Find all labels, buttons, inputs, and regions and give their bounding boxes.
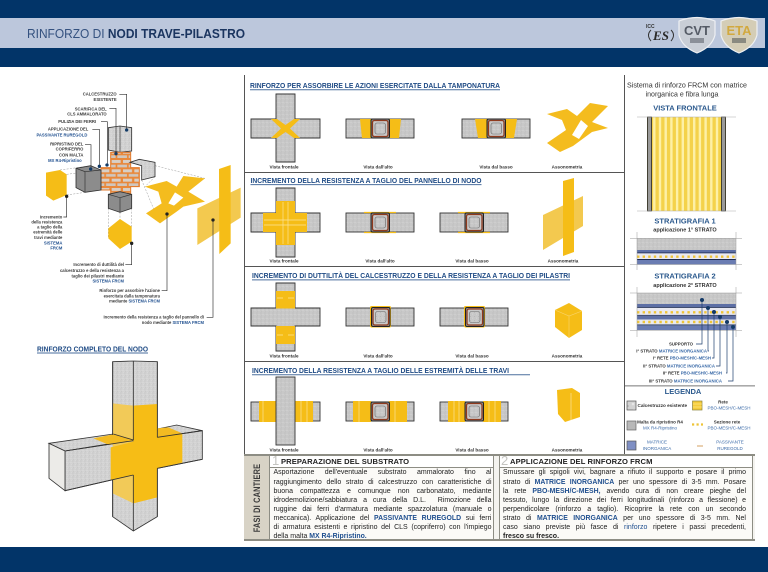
item: sezione rete: PBO-MESH/C-MESH (707, 426, 751, 430)
leader: ripristino copriferro: RIPRISTINO DEL (50, 141, 84, 146)
step 1 text: meccanica). Applicazione del PASSIVANTE RUREGOLD sui ferri (274, 515, 492, 522)
row 3: pilastri (251, 271, 583, 358)
panel: FRCM system (625, 82, 755, 386)
leader: estremità travi: a taglio della (37, 224, 63, 229)
step 2 text: strato di MATRICE INORGANICA per uno spessore di 3-5 mm. Posare (503, 479, 746, 486)
step 2 text: caso siano previste più fasce di rinforzo ripetere i passi precedenti, (503, 524, 746, 531)
bottom view: Vista dal basso (455, 354, 489, 358)
leader: calcestruzzo esistente: ESISTENTE (94, 97, 117, 102)
step 2 (499, 456, 753, 539)
beam end section (49, 443, 65, 491)
leader: ripristino copriferro: COPRIFERRO (56, 146, 84, 151)
step 1 text: idrodemolizione/sabbiatura a cura della D.L. Rimozione della (274, 497, 492, 504)
leader: estremità travi: della resistenza (31, 219, 63, 224)
front view: Vista frontale (269, 164, 299, 170)
legend title: LEGENDA (665, 387, 702, 396)
yellow jacket: left beam (46, 170, 67, 201)
front view: Vista frontale (269, 258, 299, 264)
item: malta: Malta da ripristino R4 (637, 420, 683, 424)
bottom view: Vista dal basso (455, 258, 489, 264)
panel dividers (244, 75, 624, 454)
step 2 text: la rete PBO-MESH/C-MESH, avendo cura di non creare pieghe del (503, 488, 746, 495)
stratigrafia 1: STRATIGRAFIA 1 (654, 216, 716, 226)
leader: tamponatura (99, 212, 169, 303)
column (113, 361, 157, 531)
row 1: tamponatura (250, 81, 608, 170)
item: passivante (697, 440, 744, 451)
layer labels (636, 342, 722, 384)
bottom view (440, 401, 508, 452)
axonometric: Assonometria (552, 448, 583, 452)
block: left beam (76, 166, 101, 192)
logo: ETA shield (721, 18, 757, 53)
leader: duttilità pilastri: SISTEMA FRCM (93, 278, 125, 283)
step 1 text: di armatura esistenti e ripristino del CLS (copriferro) con l'impiego (274, 524, 492, 531)
dashed guide lines (60, 166, 205, 238)
leader: estremità travi: estremità delle (33, 230, 63, 235)
leader: tamponatura: mediante SISTEMA FRCM (109, 298, 161, 303)
leader: pulizia ferri: PULIZIA DEI FERRI (58, 119, 96, 124)
top view (346, 212, 414, 264)
item: matrice (627, 440, 671, 451)
heading: vista frontale: VISTA FRONTALE (653, 104, 717, 112)
yellow X reinforcement (145, 176, 205, 223)
front view (251, 377, 320, 452)
leader: ripristino copriferro: MX R4-Ripristino (48, 158, 82, 163)
logo: ICC ES: ICC (646, 24, 655, 30)
leader: duttilità pilastri: taglio dei pilastri mediante (72, 273, 125, 278)
step 2 text (503, 468, 746, 540)
row 4: travi (251, 366, 583, 452)
front view swatch (637, 117, 736, 211)
axonometric: Assonometria (552, 164, 583, 170)
item: rete: Rete (718, 400, 728, 404)
step 2 text: Smussare gli spigoli vivi, bagnare a rifiuto il supporto e posare il primo (503, 469, 746, 476)
step 1 heading: PREPARAZIONE DEL SUBSTRATO (281, 457, 409, 466)
item: malta: MX R4-Ripristino (643, 426, 677, 430)
beam top face (49, 425, 202, 451)
system title (627, 82, 747, 98)
leader: tamponatura: Rinforzo per assorbire l'azione (99, 288, 161, 293)
item: rete: PBO-MESH/C-MESH (707, 406, 751, 410)
leader: ripristino copriferro (48, 141, 92, 171)
stratigrafia 2 (630, 272, 742, 337)
step 1 text: ruggine dai ferri d'armatura mediante spazzolatura (manuale o (274, 506, 492, 513)
panel: exploded diagram of the node (31, 92, 241, 325)
top view: Vista dall'alto (363, 448, 393, 452)
item: rete (692, 400, 751, 410)
logo: CVT shield (679, 18, 715, 53)
footer band (0, 547, 768, 572)
leader: tamponatura: esercitata dalla tamponatura (104, 293, 161, 298)
leader: pannello di nodo: nodo mediante SISTEMA FRCM (142, 320, 205, 325)
stratigrafia 2: applicazione 2° STRATO (653, 283, 717, 289)
edge lines (65, 361, 202, 531)
logo: ICC ES: ES (652, 28, 669, 43)
bottom view (440, 306, 508, 358)
step 2 text: fresco su fresco. (503, 533, 559, 540)
leader: ripristino copriferro: CON MALTA (59, 152, 83, 157)
logo: CVT shield: CVT (684, 23, 710, 38)
top view (346, 401, 414, 452)
item: matrice: MATRICE (647, 440, 667, 444)
item: sezione rete: Sezione rete (714, 420, 741, 424)
leader: duttilità pilastri (60, 242, 133, 283)
step 1 heading (270, 456, 493, 468)
logo: ICC ES (646, 24, 674, 43)
front view: Vista frontale (269, 448, 299, 452)
leader: estremità travi: Incremento (40, 214, 63, 219)
step 2 heading (500, 456, 752, 468)
bottom view: Vista dal basso (455, 448, 489, 452)
beam long face (65, 441, 133, 491)
leader: scarifica: CLS AMMALORATO (67, 111, 107, 116)
leader: calcestruzzo esistente (83, 92, 128, 132)
stratigrafia 1: applicazione 1° STRATO (653, 228, 717, 234)
stratigrafia 1 (630, 216, 742, 270)
item: malta (627, 420, 683, 430)
step 1 text: Asportazione dell'eventuale substrato ammalorato fino al (274, 469, 492, 476)
header background band (0, 0, 768, 67)
axonometric (543, 178, 583, 264)
leader: scarifica (67, 106, 118, 155)
title: RINFORZO DI NODI TRAVE-PILASTRO (27, 26, 245, 41)
layer leaders (696, 298, 735, 381)
leader: estremità travi (31, 195, 68, 251)
step 2 text: perpendicolare (rinforzo a taglio). Ricoprire la rete con un secondo (503, 506, 746, 513)
block: lower column (108, 192, 132, 212)
layer labels: II° RETE PBO-MESH/C-MESH (663, 370, 722, 376)
leader: pannello di nodo: Incremento della resistenza a taglio del pannello di (104, 315, 204, 320)
divider (625, 384, 755, 387)
axonometric: Assonometria (552, 354, 583, 358)
leader: duttilità pilastri: Incremento di duttilità del (73, 262, 124, 267)
leader: pannello di nodo (104, 218, 215, 325)
system title: Sistema di rinforzo FRCM con matrice (627, 82, 747, 90)
top view: Vista dall'alto (365, 258, 395, 264)
layer labels: SUPPORTO (669, 342, 694, 346)
leader: pulizia ferri (58, 119, 109, 167)
leader: estremità travi: travi mediante (34, 235, 63, 240)
step 1 text (274, 468, 492, 540)
top view (346, 306, 414, 358)
leader: estremità travi: FRCM (50, 246, 63, 251)
side label (244, 456, 269, 539)
layer labels: I° STRATO MATRICE INORGANICA (636, 348, 707, 354)
yellow panel reinforcement (197, 165, 241, 254)
front view (251, 283, 320, 358)
logo: ETA shield: ETA (726, 23, 752, 38)
stratigrafia 2: STRATIGRAFIA 2 (654, 272, 716, 280)
layer labels: I° RETE PBO-MESH/C-MESH (653, 356, 711, 360)
leader: estremità travi: SISTEMA (44, 241, 62, 246)
axonometric (547, 103, 608, 170)
row 2: pannello di nodo (250, 176, 583, 264)
axonometric (552, 388, 583, 452)
bottom view (440, 212, 508, 264)
leader: scarifica: SCARIFICA DEL (75, 106, 107, 111)
item: passivante: RUREGOLD (717, 446, 743, 451)
side label: FASI DI CANTIERE (252, 463, 262, 532)
item: calcestruzzo: Calcestruzzo esistente (638, 403, 687, 408)
step 1 text: buona compattezza e comunque non carbonatato, mediante (274, 488, 492, 495)
beam right side (157, 431, 202, 468)
top view (346, 119, 414, 170)
item: passivante: PASSIVANTE (716, 440, 744, 444)
top view: Vista dall'alto (363, 354, 393, 358)
front view (251, 94, 320, 170)
concrete block: top column (108, 126, 132, 152)
leader: passivante: APPLICAZIONE DEL (48, 127, 89, 132)
step 2 heading: APPLICAZIONE DEL RINFORZO FRCM (510, 457, 652, 466)
front view (251, 188, 320, 264)
leader: passivante: PASSIVANTE RUREGOLD (36, 132, 87, 137)
item: sezione rete (692, 420, 751, 430)
yellow wrap (93, 403, 182, 503)
bottom view: Vista dal basso (479, 164, 513, 170)
leader: passivante (36, 127, 101, 168)
item: matrice: INORGANICA (643, 446, 671, 451)
step 2 text: tessuto, lungo la direzione dei ferri longitudinali (rinforzo a flessione) e (503, 497, 746, 504)
illustration: complete node (49, 361, 202, 531)
axonometric (552, 303, 583, 358)
axonometric: Assonometria (548, 258, 579, 264)
layer labels: II° STRATO MATRICE INORGANICA (643, 364, 715, 368)
leader: duttilità pilastri: calcestruzzo e della resistenza a (60, 268, 125, 273)
front view: Vista frontale (269, 354, 299, 358)
panel: fasi di cantiere (244, 454, 755, 541)
yellow jacket: column (108, 219, 132, 249)
heading: rinforzo completo: RINFORZO COMPLETO DEL NODO (37, 344, 148, 354)
legend (627, 387, 751, 451)
heading: RINFORZO PER ASSORBIRE LE AZIONI ESERCITATE DALLA TAMPONATURA (250, 81, 500, 90)
step 1 (269, 456, 494, 539)
layer labels: III° STRATO MATRICE INORGANICA (649, 378, 722, 384)
bottom view (462, 119, 530, 170)
step 1 text: della malta MX R4-Ripristino. (274, 533, 367, 540)
top view: Vista dall'alto (363, 164, 393, 170)
heading: INCREMENTO DELLA RESISTENZA A TAGLIO DELLE ESTREMITÀ DELLE TRAVI (252, 366, 509, 375)
system title: inorganica e fibra lunga (646, 92, 718, 98)
heading: INCREMENTO DELLA RESISTENZA A TAGLIO DEL PANNELLO DI NODO (250, 176, 482, 185)
step 1 text: raggiungimento dello strato di calcestruzzo con caratteristiche di (274, 479, 492, 486)
prepared node cross (101, 152, 139, 194)
heading: INCREMENTO DI DUTTILITÀ DEL CALCESTRUZZO E DELLA RESISTENZA A TAGLIO DEI PILASTRI (252, 271, 570, 280)
step 2 text: strato di MATRICE INORGANICA per uno spessore di 3-5 mm. Nel (503, 515, 746, 522)
block: right beam (130, 159, 155, 180)
leader: calcestruzzo esistente: CALCESTRUZZO (83, 92, 117, 97)
